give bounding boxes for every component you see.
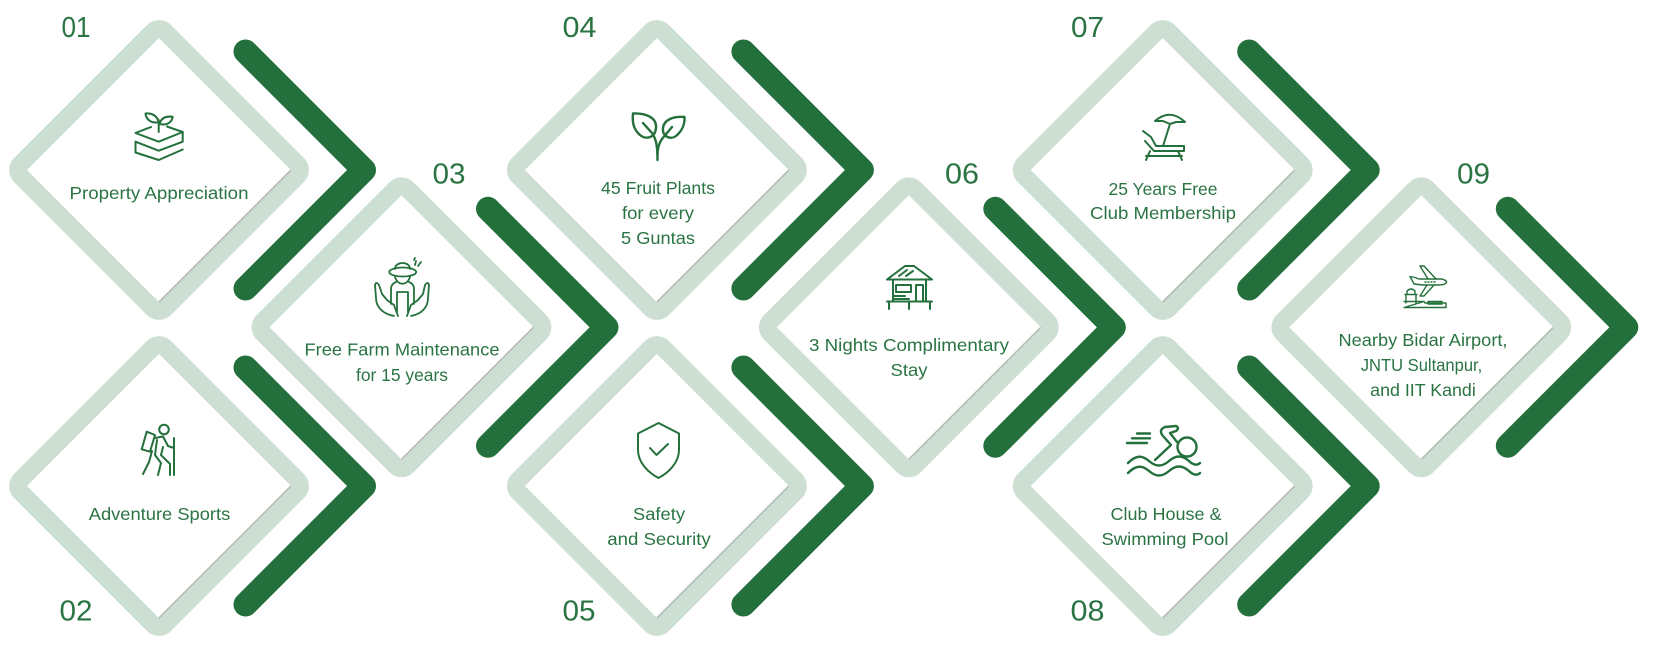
number 06: 06 xyxy=(945,158,979,190)
label xyxy=(809,335,1009,380)
label: and Security xyxy=(607,529,711,549)
label: Swimming Pool xyxy=(1102,529,1228,549)
diamond frame xyxy=(2,13,316,327)
number 01: 01 xyxy=(62,12,90,44)
chevron arrow xyxy=(1249,368,1368,604)
label xyxy=(304,340,500,385)
icon: sprout on soil block xyxy=(136,113,183,160)
panel: 05 safety and security xyxy=(500,329,862,643)
label: Club Membership xyxy=(1090,203,1236,223)
panel: 07 club membership xyxy=(1006,12,1368,327)
diamond frame xyxy=(245,170,558,484)
number 04: 04 xyxy=(562,12,596,44)
chevron arrow xyxy=(1508,209,1626,446)
diamond frame xyxy=(1006,13,1320,327)
number 09: 09 xyxy=(1457,158,1490,190)
icon: beach umbrella and lounger xyxy=(1143,115,1185,160)
chevron arrow xyxy=(246,368,364,604)
label: Nearby Bidar Airport, xyxy=(1338,330,1508,350)
chevron arrow xyxy=(1249,52,1368,288)
panel: 08 club house and pool xyxy=(1006,329,1368,643)
panel: 02 adventure sports xyxy=(2,329,364,643)
label: Club House & xyxy=(1110,504,1222,524)
number 08: 08 xyxy=(1070,596,1104,628)
label: JNTU Sultanpur, xyxy=(1361,355,1482,375)
label: Safety xyxy=(633,504,685,524)
panel: 06 complimentary stay xyxy=(752,158,1114,484)
label xyxy=(1090,179,1236,223)
chevron arrow xyxy=(246,52,364,288)
diamond frame xyxy=(500,329,814,643)
label: for 15 years xyxy=(356,365,448,385)
label: and IIT Kandi xyxy=(1370,380,1476,400)
diamond frame xyxy=(1264,170,1578,484)
diamond frame xyxy=(752,170,1066,484)
label: 25 Years Free xyxy=(1108,179,1218,199)
label: Stay xyxy=(890,360,928,380)
diamond frame xyxy=(500,13,814,327)
label: Adventure Sports xyxy=(89,504,231,524)
icon: airplane and airport xyxy=(1404,266,1447,308)
icon: cottage on stilts xyxy=(887,266,932,309)
number 07: 07 xyxy=(1071,12,1104,44)
panel: 03 free farm maintenance xyxy=(245,158,607,484)
chevron arrow xyxy=(743,52,862,288)
panel: 01 property appreciation xyxy=(2,12,364,327)
number 05: 05 xyxy=(562,596,596,628)
chevron arrow xyxy=(743,368,862,604)
label: Property Appreciation xyxy=(70,183,248,203)
icon: shield with check xyxy=(638,423,679,478)
label: for every xyxy=(622,203,694,223)
icon: farmer with hands xyxy=(375,258,429,316)
label: Free Farm Maintenance xyxy=(304,340,500,360)
label: 3 Nights Complimentary xyxy=(809,335,1009,355)
label xyxy=(1338,330,1508,400)
panel: 04 fruit plants xyxy=(500,12,862,327)
label: 5 Guntas xyxy=(621,228,695,248)
label xyxy=(607,504,711,549)
panel: 09 nearby locations xyxy=(1264,158,1626,484)
chevron arrow xyxy=(995,209,1114,446)
diamond frame xyxy=(1006,329,1320,643)
icon: swimmer xyxy=(1127,426,1200,476)
icon: plant with two leaves xyxy=(633,113,685,160)
label: 45 Fruit Plants xyxy=(601,178,715,198)
chevron arrow xyxy=(488,209,606,446)
label xyxy=(601,178,715,248)
number 03: 03 xyxy=(432,158,466,190)
label xyxy=(1102,504,1228,549)
number 02: 02 xyxy=(60,596,92,628)
diamond frame xyxy=(2,329,316,643)
icon: hiker xyxy=(142,425,174,475)
